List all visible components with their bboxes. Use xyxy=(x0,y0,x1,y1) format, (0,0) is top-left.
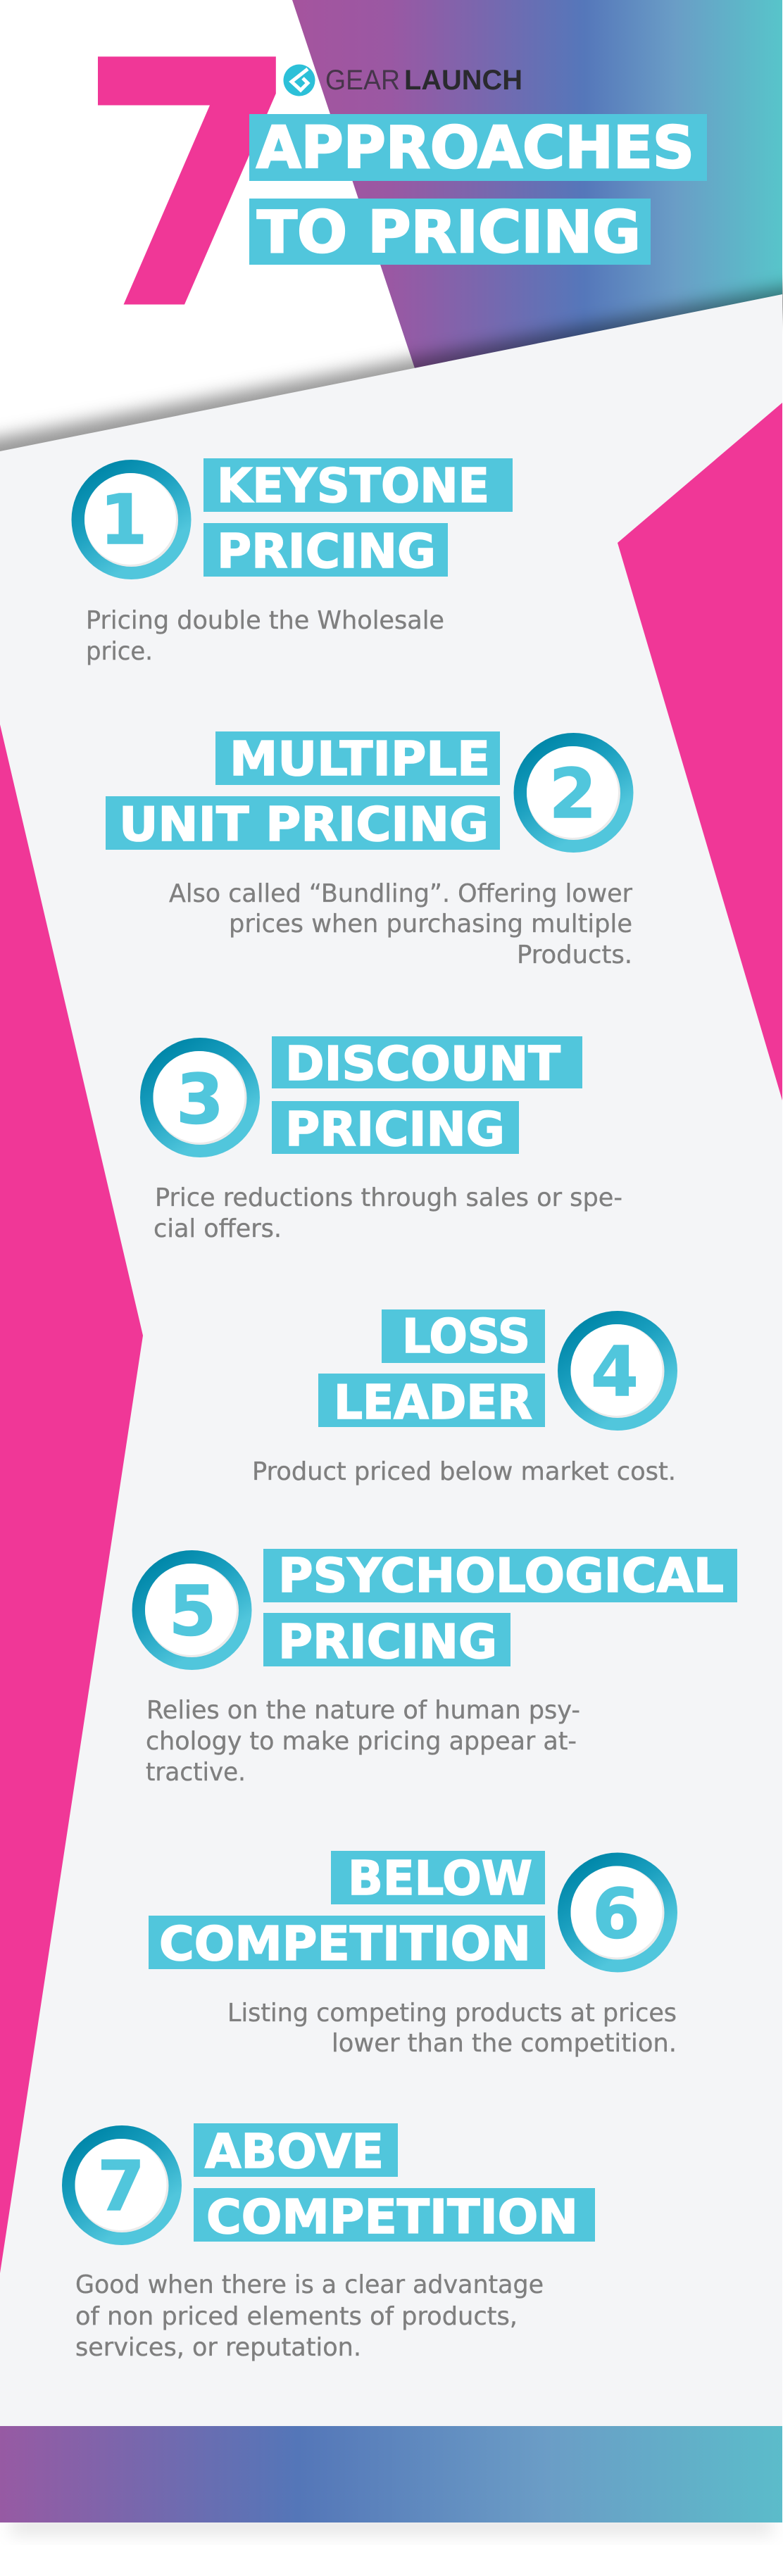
item 1: keystone pricing xyxy=(72,458,513,666)
heading xyxy=(272,1036,582,1157)
item 2: multiple unit pricing xyxy=(106,731,634,969)
icon: number 7 badge xyxy=(62,2125,182,2245)
heading: KEYSTONE xyxy=(217,458,489,513)
icon: number 4 badge: 4 xyxy=(591,1332,639,1412)
description xyxy=(75,2270,544,2362)
heading: COMPETITION xyxy=(206,2189,578,2244)
description: Relies on the nature of human psy- xyxy=(146,1696,580,1725)
item 5: psychological pricing xyxy=(132,1548,737,1787)
description: Also called “Bundling”. Offering lower xyxy=(169,879,632,908)
heading: DISCOUNT xyxy=(285,1036,560,1091)
icon: number 4 badge xyxy=(558,1311,677,1431)
description: Price reductions through sales or spe- xyxy=(155,1183,622,1212)
icon: logo mark xyxy=(283,65,315,96)
title line 1: APPROACHES xyxy=(256,115,694,182)
heading: MULTIPLE xyxy=(230,731,490,786)
description xyxy=(169,879,632,969)
description: services, or reputation. xyxy=(75,2333,361,2362)
heading: UNIT PRICING xyxy=(119,797,489,852)
description: cial offers. xyxy=(154,1214,282,1243)
description: prices when purchasing multiple xyxy=(229,910,632,938)
description: Pricing double the Wholesale xyxy=(86,606,444,635)
icon: number 7 badge: 7 xyxy=(97,2147,145,2226)
item 6: below competition xyxy=(149,1851,677,2058)
heading: PRICING xyxy=(285,1102,505,1157)
icon: number 1 badge: 1 xyxy=(100,480,147,560)
heading: PRICING xyxy=(278,1614,497,1669)
heading: LEADER xyxy=(334,1375,532,1430)
description: tractive. xyxy=(146,1758,246,1787)
heading: COMPETITION xyxy=(159,1916,531,1971)
heading: BELOW xyxy=(348,1851,532,1906)
icon: number 6 badge: 6 xyxy=(592,1874,640,1954)
item 7: above competition xyxy=(62,2123,595,2362)
logo wordmark: LAUNCH xyxy=(404,65,522,96)
icon: number 6 badge xyxy=(558,1853,677,1973)
heading: PRICING xyxy=(217,524,436,579)
description xyxy=(86,606,444,666)
header shadow on diagonal xyxy=(0,283,783,479)
description: Good when there is a clear advantage xyxy=(75,2270,544,2299)
icon: number 1 badge xyxy=(72,460,192,579)
description xyxy=(146,1696,580,1787)
heading xyxy=(263,1548,737,1669)
title bar: approaches xyxy=(249,114,707,181)
logo: GearLaunch xyxy=(283,65,522,96)
logo wordmark: GEAR xyxy=(325,65,400,96)
icon: number 2 badge: 2 xyxy=(549,754,596,834)
heading: PSYCHOLOGICAL xyxy=(278,1548,724,1603)
description xyxy=(227,1999,677,2058)
description xyxy=(154,1183,622,1243)
item 4: loss leader xyxy=(252,1309,677,1486)
heading xyxy=(203,458,513,579)
heading: ABOVE xyxy=(205,2124,384,2179)
icon: number 5 badge: 5 xyxy=(169,1571,216,1651)
description: Listing competing products at prices xyxy=(227,1999,677,2028)
heading: LOSS xyxy=(402,1309,530,1364)
header gradient panel xyxy=(292,0,782,368)
description: chology to make pricing appear at- xyxy=(146,1727,577,1756)
icon: number 3 badge: 3 xyxy=(176,1060,224,1139)
description: Products. xyxy=(517,941,632,969)
footer gradient band xyxy=(0,2426,782,2522)
description: Product priced below market cost. xyxy=(252,1457,676,1486)
big number 7: 7 xyxy=(77,0,301,384)
description: price. xyxy=(86,637,153,666)
title xyxy=(249,114,707,266)
heading xyxy=(149,1851,545,1971)
pink shape right xyxy=(618,403,782,1100)
title bar: to pricing xyxy=(249,199,651,265)
icon: number 3 badge xyxy=(140,1038,260,1157)
icon: number 2 badge xyxy=(514,733,634,853)
description: of non priced elements of products, xyxy=(75,2302,518,2331)
heading xyxy=(194,2123,595,2244)
heading xyxy=(318,1309,545,1430)
footer shadow xyxy=(11,2517,772,2534)
title line 2: TO PRICING xyxy=(257,199,641,266)
description: lower than the competition. xyxy=(332,2029,677,2058)
item 3: discount pricing xyxy=(140,1036,622,1243)
icon: number 5 badge xyxy=(132,1550,252,1670)
pink shape left xyxy=(0,724,143,2273)
heading xyxy=(106,731,500,852)
